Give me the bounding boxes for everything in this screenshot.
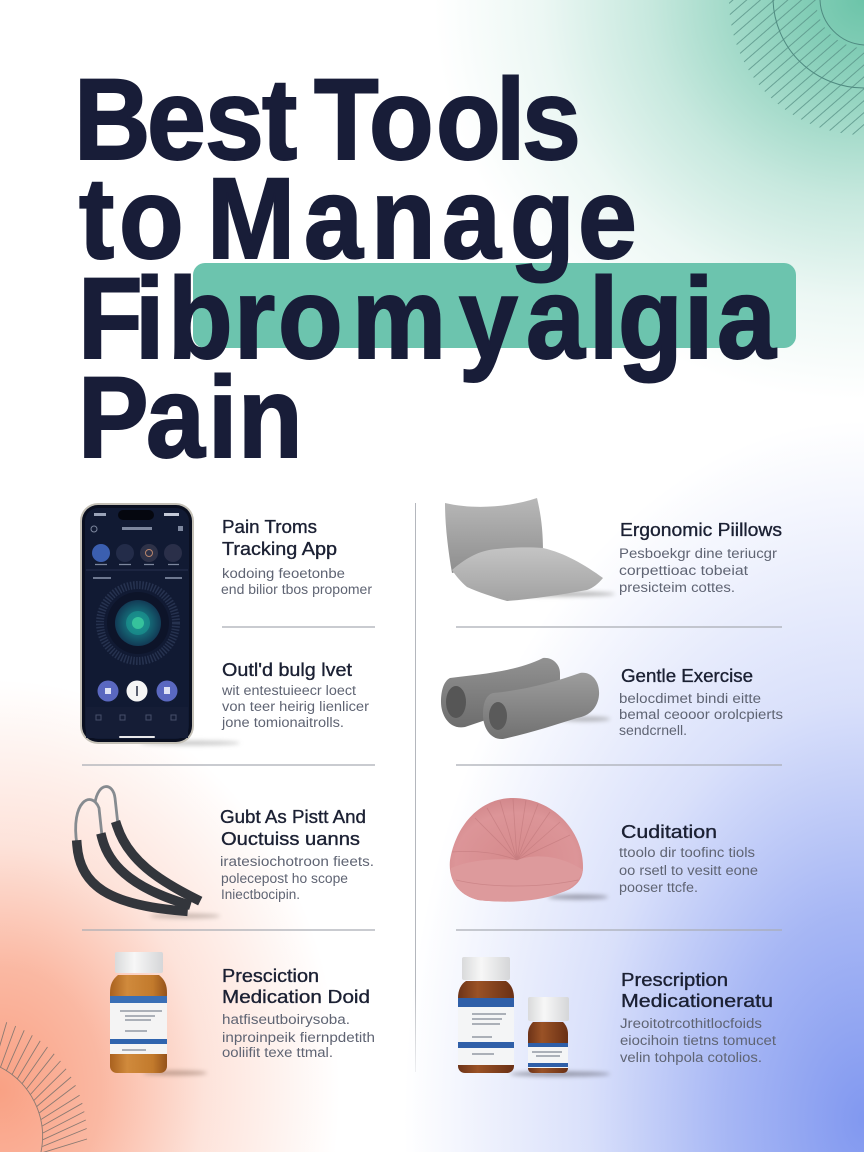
text: exercise description	[619, 691, 783, 738]
text: exercise description: belocdimet bindi eitte	[619, 691, 761, 706]
panel: gentle exercise	[441, 658, 783, 739]
text: medication description: hatfiseutboirysoba.	[222, 1012, 350, 1027]
heading: presciction medication doid: Medication Doid	[222, 987, 370, 1007]
text: hooks description: polecepost ho scope	[221, 871, 348, 886]
text: exercise description: bemal ceooor orolcpierts	[619, 707, 783, 722]
text: app description	[221, 566, 373, 597]
text: exercise description: sendcrnell.	[619, 723, 687, 738]
heading: presciction medication doid: Presciction	[222, 966, 319, 986]
heading: gentle exercise: Gentle Exercise	[621, 666, 753, 686]
decorative hatched arcs top right	[729, 0, 864, 135]
icon: two medicine bottles	[458, 957, 610, 1076]
title highlight bar	[193, 263, 796, 348]
heading: gubt as pistt and outctuiss uanns: Gubt As Pistt And	[220, 807, 366, 827]
heading: pain troms tracking app: Pain Troms	[222, 517, 317, 537]
heading: ergonomic pillows: Ergonomic Piillows	[620, 520, 782, 540]
title	[74, 56, 777, 482]
title: Best Tools	[74, 56, 581, 184]
heading: gubt as pistt and outctuiss uanns	[220, 807, 366, 849]
heading: pain troms tracking app	[222, 517, 337, 559]
text: pillows description: Pesboekgr dine teriucgr	[619, 546, 778, 561]
decorative hatched arc bottom left	[0, 1022, 87, 1152]
text: description: wit entestuieecr loect	[221, 683, 356, 698]
text: app description: end bilior tbos propomer	[221, 582, 373, 597]
panel: cuditation	[450, 798, 758, 902]
heading: prescription medicationeratu: Prescription	[621, 970, 728, 990]
icon: curved hook tools	[76, 787, 220, 918]
text: pillows description: corpettioac tobeiat	[619, 563, 748, 578]
heading: cuditation: Cuditation	[621, 822, 717, 842]
text: description: von teer heirig lienlicer	[222, 699, 370, 714]
text: prescription description: eiocihoin tietns tomucet	[620, 1033, 776, 1048]
text: pillows description: presicteim cottes.	[619, 580, 735, 595]
panel: prescription medication right	[458, 957, 776, 1076]
icon: smartphone app	[80, 503, 240, 746]
text: app description: kodoing feoetonbe	[222, 566, 345, 581]
icon: foam rollers	[441, 658, 610, 739]
text: medication description: inproinpeik fiernpdetith	[222, 1030, 375, 1045]
heading: outl'd bulg lvet: Outl'd bulg lvet	[222, 660, 352, 680]
heading: prescription medicationeratu	[621, 970, 773, 1011]
text: description	[221, 683, 370, 730]
text: hooks description	[220, 854, 374, 902]
icon: pink bean bag cushion	[450, 798, 608, 902]
text: hooks description: Iniectbocipin.	[221, 887, 300, 902]
text: description: jone tomionaitrolls.	[221, 715, 344, 730]
title: Pain	[78, 354, 303, 482]
heading: presciction medication doid	[222, 966, 370, 1007]
title: Fibromyalgia	[78, 255, 777, 383]
text: prescription description	[620, 1016, 776, 1065]
panel: posture aids	[76, 787, 374, 918]
icon: medication bottle	[110, 952, 207, 1076]
heading: gubt as pistt and outctuiss uanns: Ouctuiss uanns	[221, 829, 360, 849]
text: cuditation description	[619, 845, 758, 895]
text: prescription description: Jreoitotrcothitlocfoids	[620, 1016, 762, 1031]
text: cuditation description: oo rsetl to vesitt eone	[619, 863, 758, 878]
heading: prescription medicationeratu: Medicationeratu	[621, 991, 773, 1011]
text: prescription description: velin tohpola cotolios.	[620, 1050, 762, 1065]
text: cuditation description: pooser ttcfe.	[619, 880, 698, 895]
text: medication description	[222, 1012, 375, 1060]
panel: outlined tool text	[221, 660, 370, 730]
text: pillows description	[619, 546, 778, 595]
panel: prescription medication left	[110, 952, 375, 1076]
icon: grey pillows	[445, 498, 615, 601]
text: cuditation description: ttoolo dir toofinc tiols	[619, 845, 755, 860]
text: medication description: ooliifit texe ttmal.	[222, 1045, 333, 1060]
title: to Manage	[79, 155, 637, 283]
panel: pain tracking app	[80, 503, 373, 746]
text: hooks description: iratesiochotroon fieets.	[220, 854, 374, 869]
panel: ergonomic pillows	[445, 498, 782, 601]
heading: pain troms tracking app: Tracking App	[222, 539, 337, 559]
